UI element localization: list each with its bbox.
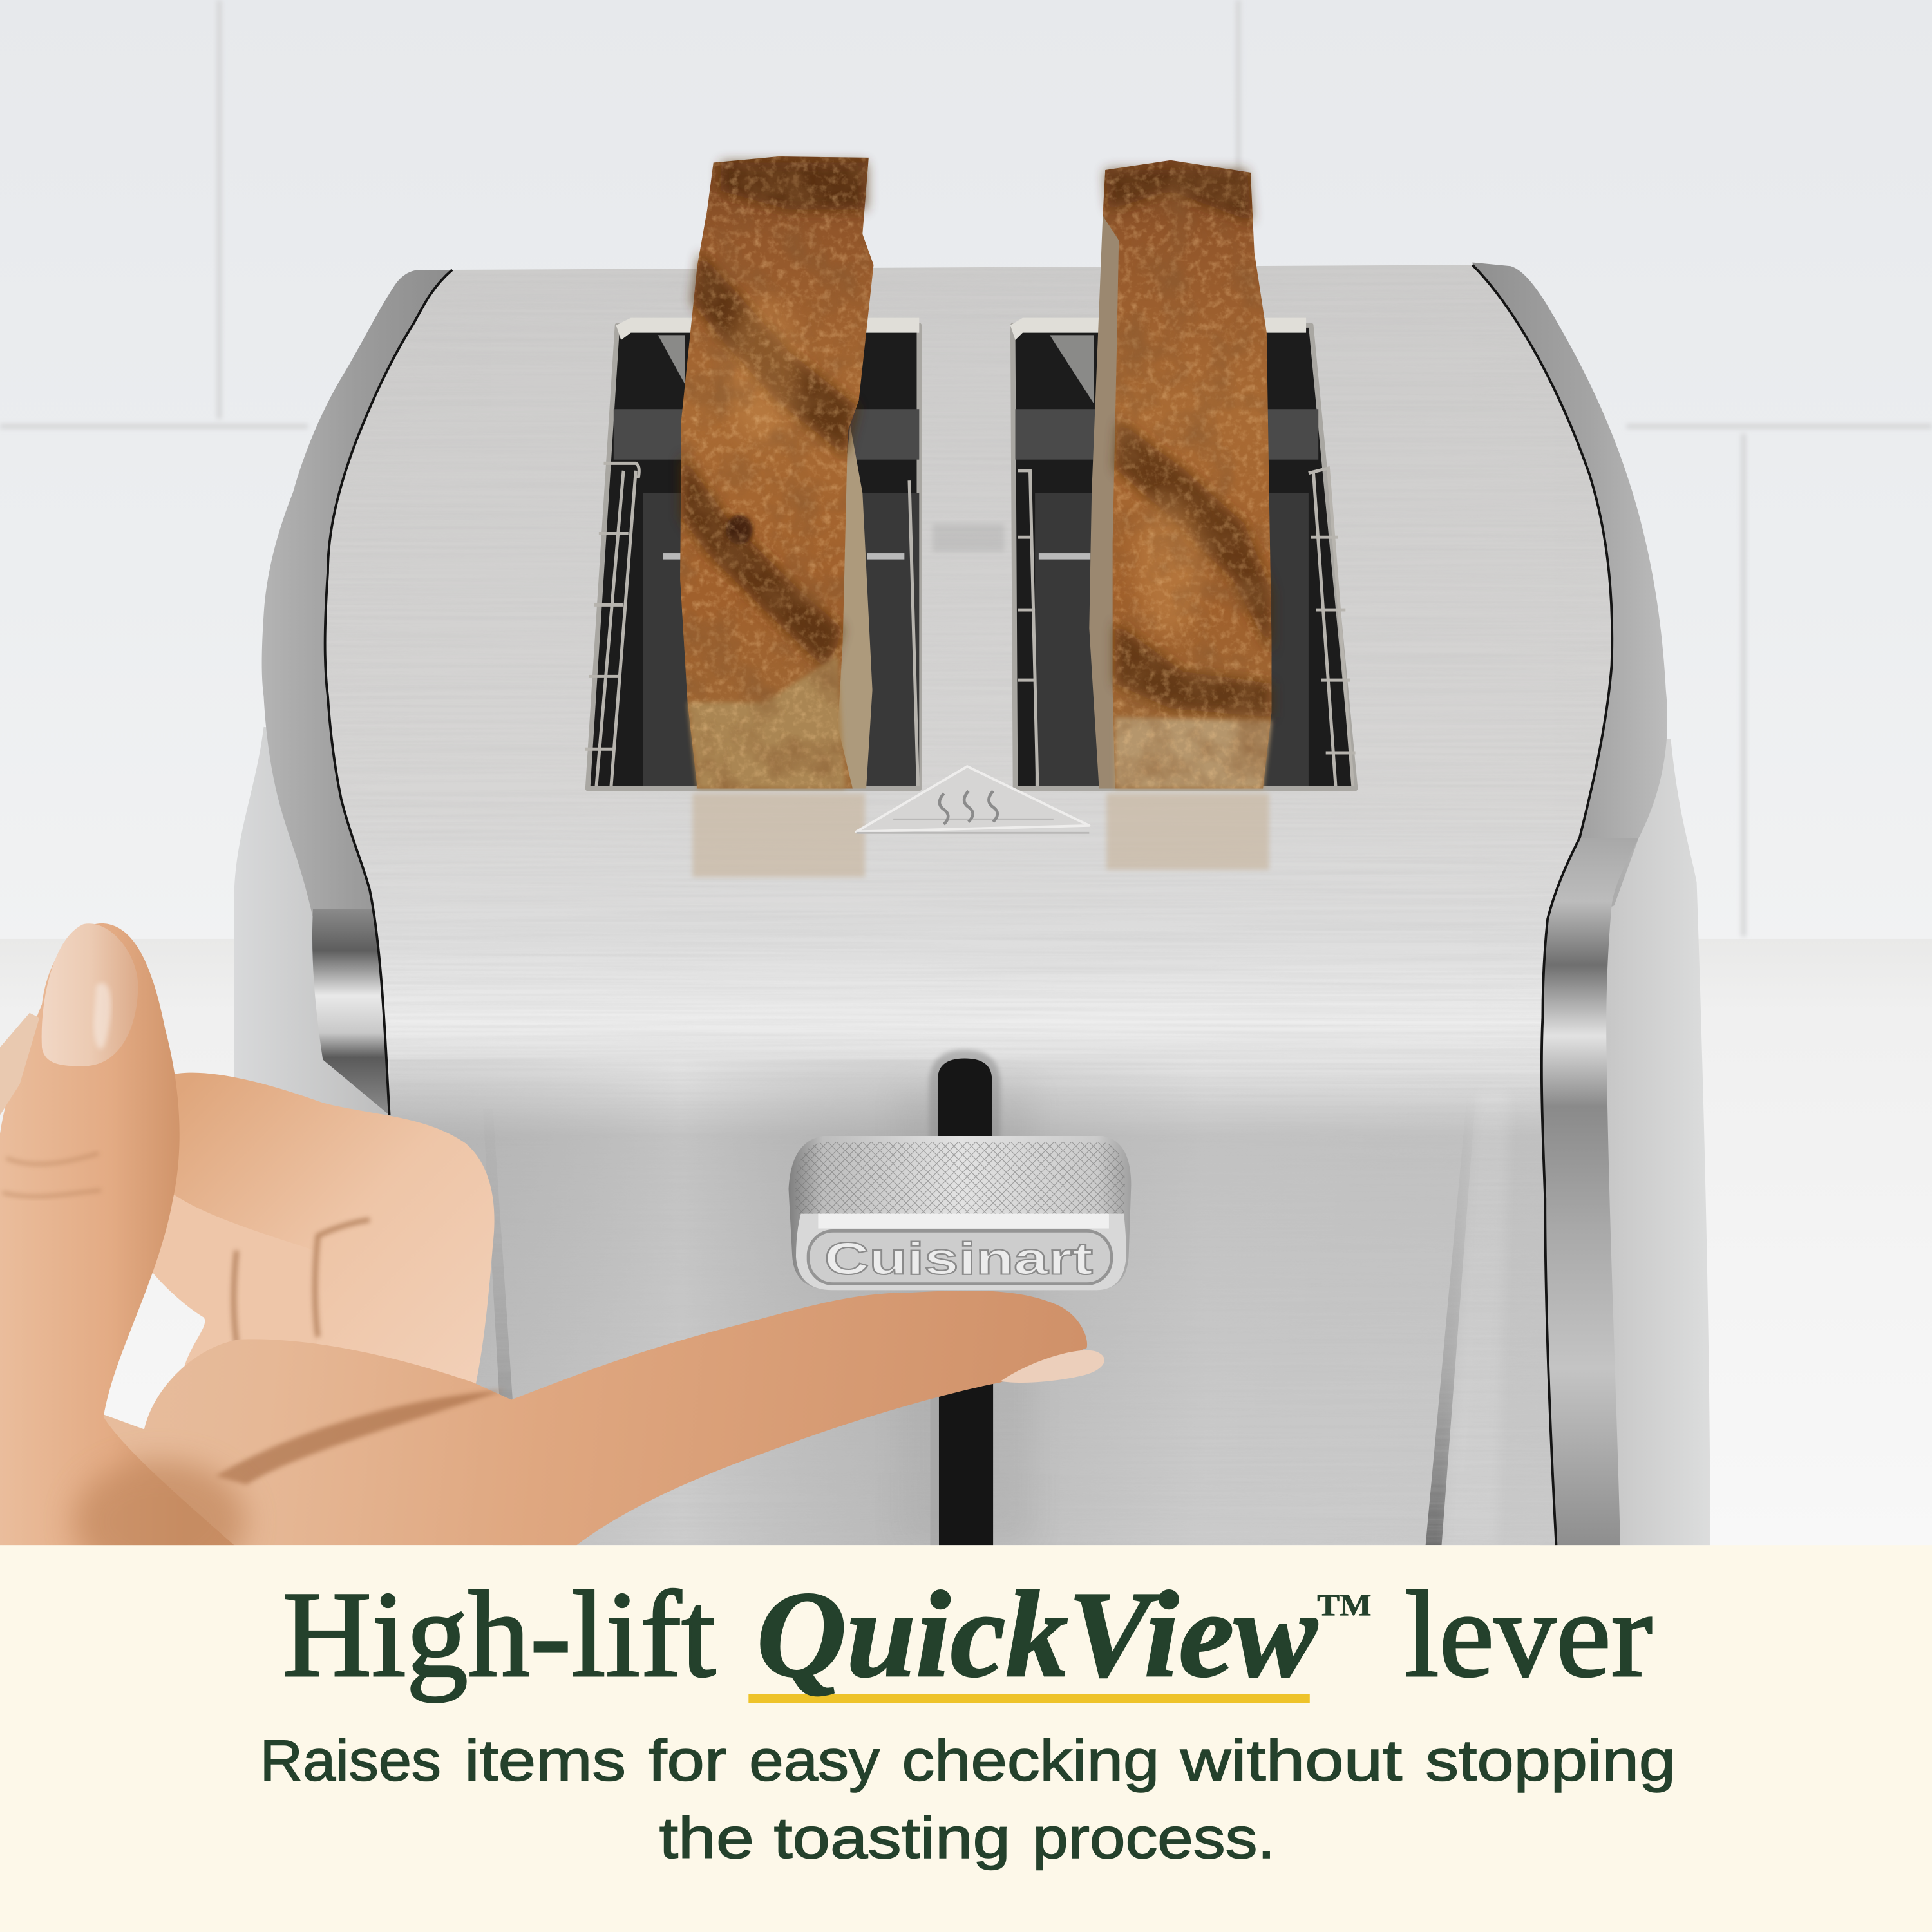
crumb edge — [1089, 216, 1121, 788]
left slot wire rack — [585, 463, 918, 786]
palm crease shading — [216, 1390, 505, 1484]
left chrome reflection — [312, 909, 390, 1115]
toast dark scores — [1105, 170, 1271, 717]
knurled grip — [795, 1142, 1125, 1214]
lever slot — [929, 1050, 1001, 1545]
left bread slot — [585, 318, 919, 788]
knob highlight strip — [818, 1214, 1109, 1229]
lever knob — [788, 1136, 1131, 1290]
toast dark scores — [681, 163, 866, 672]
heading: High-lift — [282, 1567, 716, 1703]
description line 1: without — [1180, 1729, 1402, 1794]
index fingernail — [42, 923, 138, 1066]
description line 1: for — [648, 1729, 727, 1794]
background finger behind index — [0, 1013, 39, 1115]
left toast slice — [680, 156, 874, 788]
toaster — [234, 156, 1710, 1545]
left dark side band — [262, 270, 452, 936]
description line 2: the — [659, 1806, 754, 1871]
toast texture — [1103, 160, 1271, 788]
heading — [282, 1567, 1653, 1703]
left lower outer panel — [234, 727, 394, 1232]
description line 2: toasting — [774, 1806, 1010, 1871]
toast texture — [680, 156, 874, 788]
pointing finger and palm — [0, 1291, 1087, 1545]
heat triangle mark — [857, 766, 1089, 833]
crust — [680, 156, 874, 788]
right slot wire racks — [1018, 468, 1356, 786]
heading: TM — [1317, 1588, 1371, 1622]
toaster body face — [325, 265, 1612, 1545]
crust — [1103, 160, 1271, 788]
toast base crumb — [688, 656, 845, 788]
toast base crumb — [1115, 717, 1271, 788]
heading: lever — [1405, 1567, 1653, 1703]
toast reflections on top — [692, 793, 1269, 877]
right dark side band — [1472, 263, 1667, 936]
description line 1: checking — [902, 1729, 1159, 1794]
finger crease — [234, 1220, 370, 1343]
description line 1: items — [464, 1729, 626, 1794]
description line 1: stopping — [1426, 1729, 1676, 1794]
Cuisinart logo: Cuisinart — [824, 1233, 1093, 1284]
description line 1: Raises — [260, 1729, 441, 1794]
knob front plate — [796, 1214, 1126, 1290]
crumb edge — [813, 425, 873, 788]
logo badge — [808, 1231, 1112, 1284]
upright index finger — [0, 923, 234, 1545]
heading: QuickView — [757, 1567, 1318, 1703]
yellow underline — [748, 1694, 1310, 1703]
pointing fingernail — [1001, 1350, 1104, 1383]
black seam lines — [325, 265, 1612, 1545]
back fingers — [138, 1177, 323, 1378]
curled middle finger — [166, 1073, 495, 1385]
body brushed shading — [384, 967, 1507, 1545]
description line 1: easy — [749, 1729, 880, 1794]
wrist shading blending finger and palm — [74, 1460, 247, 1584]
caption band — [0, 1545, 1932, 1932]
finger joint creases — [3, 1153, 101, 1197]
knob body — [788, 1136, 1131, 1290]
right toast slice — [1089, 160, 1271, 788]
embossed centre mark — [933, 524, 1004, 552]
right chrome reflection — [1542, 838, 1639, 1545]
right lower outer panel — [1540, 739, 1710, 1545]
hand — [0, 923, 1104, 1584]
description line 2: process. — [1032, 1806, 1275, 1871]
nail highlight — [93, 983, 111, 1049]
right bread slot — [1010, 318, 1356, 788]
